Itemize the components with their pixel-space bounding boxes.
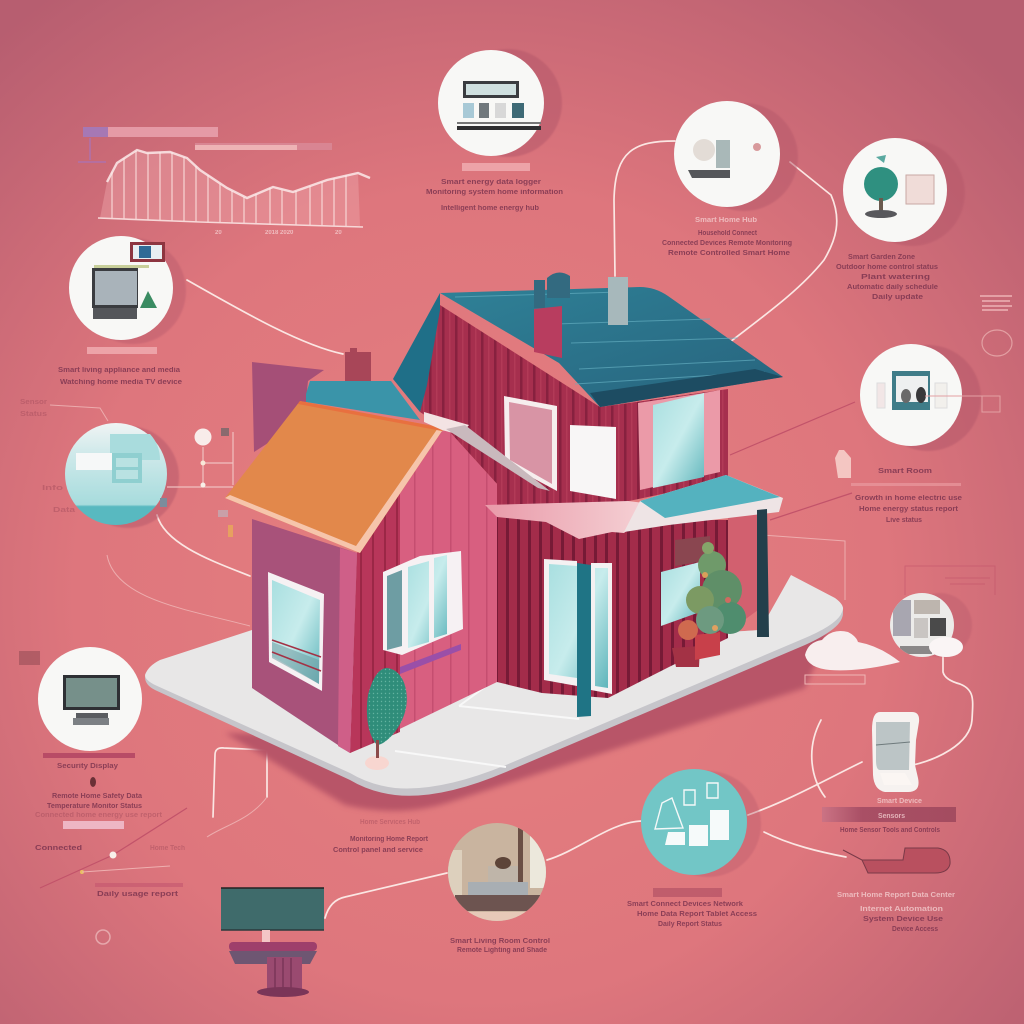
monitor on table	[221, 888, 324, 997]
caption: top centre: Smart energy data logger	[441, 179, 541, 186]
gray chimney	[608, 277, 628, 325]
grey strip and vent	[424, 412, 469, 435]
caption: top right 2: Outdoor home control status	[836, 264, 938, 271]
cloud	[805, 631, 900, 670]
caption: thermostat: Smart Device	[877, 798, 922, 805]
outline box: cloud appliance	[805, 566, 995, 684]
circle: upper left	[69, 236, 186, 344]
porch teal roof	[624, 475, 783, 532]
teal post	[577, 563, 591, 717]
caption: top centre: Intelligent home energy hub	[441, 205, 539, 212]
chart: area line chart, top left	[78, 127, 370, 236]
caption: under house: Home Services Hub	[360, 819, 420, 826]
caption: room circle: Smart Living Room Control	[450, 938, 550, 945]
circle: cloud appliance	[888, 592, 972, 658]
porch post	[757, 509, 769, 637]
circle: top right 2	[843, 138, 965, 246]
caption: lower left: Security Display	[57, 763, 118, 770]
room circle: bottom centre	[447, 822, 550, 922]
rear teal roof	[306, 381, 420, 420]
teal circle: bottom right	[641, 769, 761, 877]
caption: teal circle: Smart Connect Devices Network	[627, 901, 743, 908]
upper window 1	[504, 396, 557, 491]
caption: right middle: Growth in home electric use	[855, 495, 962, 502]
porch back wall	[728, 512, 758, 632]
upper window 2	[638, 390, 720, 490]
caption: top right 2: Smart Garden Zone	[848, 254, 915, 261]
device: white thermostat	[872, 712, 919, 792]
caption: room circle: Remote Lighting and Shade	[457, 947, 547, 954]
caption: top right 2: Daily update	[872, 294, 923, 301]
caption: lower left: Remote Home Safety Data	[52, 793, 142, 800]
faint side labels: left middle: Info	[42, 485, 63, 492]
chart: area line chart, top left: 20	[215, 230, 222, 236]
faint side labels: left middle	[20, 399, 75, 514]
device: router	[843, 848, 950, 873]
plant	[672, 542, 746, 667]
lower right window	[661, 562, 700, 626]
caption: upper left	[58, 347, 182, 386]
caption: upper left: Watching home media TV device	[60, 379, 182, 386]
upper door	[570, 425, 616, 499]
orange roof	[225, 401, 444, 553]
caption: lower left	[35, 753, 185, 898]
chart: area line chart, top left: 20	[335, 230, 342, 236]
main roof	[440, 287, 783, 407]
rear chimney	[252, 362, 324, 452]
caption: teal circle: Daily Report Status	[658, 921, 722, 928]
caption: lower left: Connected	[35, 845, 82, 852]
caption: top right 2: Plant watering	[861, 274, 930, 281]
gable window	[268, 572, 324, 691]
caption: thermostat: Home Sensor Tools and Controls	[840, 827, 940, 834]
circle: top right 1	[674, 101, 798, 211]
caption: router	[837, 892, 955, 933]
dark chimneys	[534, 272, 570, 308]
caption: upper left: Smart living appliance and media	[58, 367, 180, 374]
caption: lower left: Daily usage report	[97, 891, 179, 898]
caption: under house	[333, 819, 429, 854]
caption: top centre	[426, 163, 563, 212]
caption: thermostat	[822, 798, 956, 834]
chart: area line chart, top left: 2018 2020	[265, 230, 294, 236]
left wing gable wall	[252, 519, 357, 753]
caption: router: Internet Automation	[860, 906, 943, 913]
left wing dark strip	[350, 492, 400, 753]
hanging sign	[675, 536, 710, 566]
main roof side	[393, 293, 440, 412]
caption: lower left: Home Tech	[150, 845, 185, 852]
tree	[367, 668, 407, 745]
caption: top right 1: Household Connect	[698, 230, 758, 237]
caption: teal circle	[627, 888, 757, 928]
small side note: top right	[925, 296, 1012, 412]
caption: router: Device Access	[892, 926, 938, 933]
house	[225, 272, 783, 770]
caption: top right 1: Connected Devices Remote Monitoring	[662, 240, 792, 247]
caption: teal circle: Home Data Report Tablet Access	[637, 911, 757, 918]
caption: top right 2: Automatic daily schedule	[847, 284, 938, 291]
caption: router: System Device Use	[863, 916, 943, 923]
house platform	[145, 575, 843, 811]
left wing pink front wall	[350, 430, 497, 753]
connector lines	[40, 141, 973, 918]
faint side labels: left middle: Sensor	[20, 399, 47, 406]
caption: top right 2	[836, 254, 938, 301]
circle: top centre	[438, 49, 562, 157]
circle: right middle	[860, 344, 981, 451]
circle: lower left	[38, 647, 142, 751]
wing window sill	[400, 644, 461, 674]
caption: right middle: Smart Room	[878, 468, 932, 475]
door windows	[544, 559, 612, 694]
small chimney	[345, 348, 371, 382]
caption: top right 1	[662, 217, 792, 257]
faint side labels: left middle: Data	[53, 507, 75, 514]
caption: top centre: Monitoring system home information	[426, 189, 563, 196]
porch band	[485, 501, 660, 539]
caption: router: Smart Home Report Data Center	[837, 892, 955, 899]
circle: left middle	[65, 423, 179, 528]
upper wall	[420, 305, 728, 505]
timeline markers: lower left	[80, 852, 170, 944]
caption: lower left: Connected home energy use report	[35, 812, 163, 819]
red chimney	[534, 306, 562, 358]
caption: top right 1: Remote Controlled Smart Home	[668, 250, 790, 257]
small sensors: left middle	[160, 428, 233, 537]
wing window	[383, 551, 463, 655]
caption: top right 1: Smart Home Hub	[695, 217, 757, 224]
lower wall	[497, 516, 728, 698]
caption: thermostat: Sensors	[878, 813, 905, 820]
faint side labels: left middle: Status	[20, 411, 47, 418]
small icon: lower left corner	[19, 651, 40, 665]
caption: lower left: Temperature Monitor Status	[47, 803, 142, 810]
caption: right middle	[835, 450, 962, 524]
caption: right middle: Home energy status report	[859, 506, 959, 513]
caption: under house: Monitoring Home Report	[350, 836, 429, 843]
caption: room circle	[450, 938, 550, 954]
caption: right middle: Live status	[886, 517, 922, 524]
caption: under house: Control panel and service	[333, 847, 423, 854]
